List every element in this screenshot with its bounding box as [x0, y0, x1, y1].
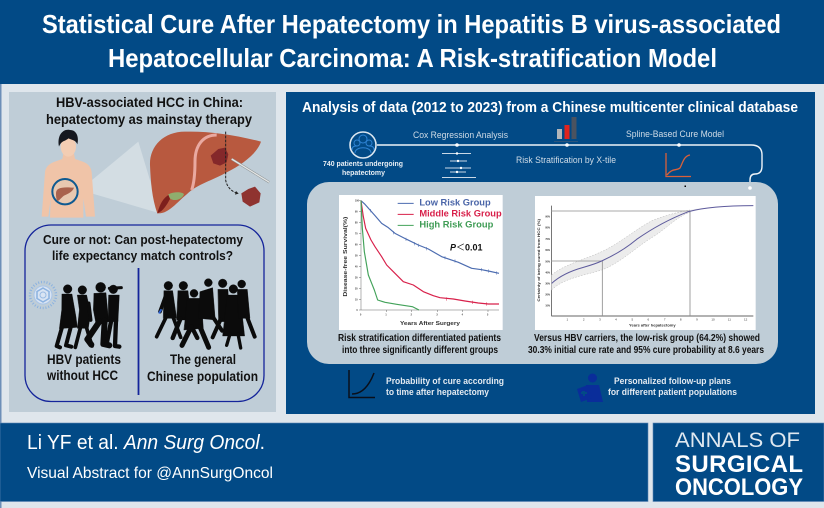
chart: probability of cure: 5: [631, 317, 633, 321]
footer: citation: [0, 423, 648, 502]
chart: probability of cure: Certainty of being cured from HCC (%): [537, 218, 541, 302]
logo text: ONCOLOGY: [675, 474, 803, 501]
illustration: patient and liver: [42, 130, 269, 218]
chart: disease-free survival: Low Risk Group: [419, 198, 491, 208]
chart: probability of cure: 80%: [545, 228, 551, 230]
text: probability of cure: [386, 376, 504, 398]
chart: disease-free survival: 90: [355, 212, 358, 214]
chart: disease-free survival: 40: [355, 266, 358, 269]
chart: disease-free survival: Years After Surgery: [400, 321, 461, 327]
chart: probability of cure: 10%: [545, 305, 551, 307]
chart: disease-free survival: Middle Risk Group: [419, 209, 502, 219]
logo text: SURGICAL: [675, 451, 803, 478]
text: follow-up plans: [608, 376, 737, 398]
label: 740 patients: [323, 159, 403, 177]
chart: probability of cure: 20%: [545, 294, 551, 296]
question text: [43, 232, 244, 263]
label: 740 patients: 740 patients undergoing: [323, 159, 403, 168]
text: follow-up plans: for different patient populations: [608, 387, 737, 398]
left heading: hepatectomy as mainstay therapy: [46, 111, 252, 127]
chart: probability of cure: 8: [680, 317, 682, 321]
magnifier circle: [52, 179, 78, 204]
results card: [307, 182, 778, 364]
title text: [42, 9, 781, 73]
title text: Hepatocellular Carcinoma: A Risk-stratification Model: [108, 43, 717, 73]
panel: cure or not: [25, 225, 264, 402]
chart: probability of cure: 7: [664, 317, 666, 321]
chart: probability of cure: 50%: [545, 261, 551, 263]
label: 740 patients: hepatectomy: [342, 168, 386, 177]
chart: probability of cure: 11: [728, 317, 731, 321]
chart: probability of cure: 12: [744, 317, 748, 321]
chart: disease-free survival: 20: [355, 289, 358, 291]
chart: disease-free survival: 100: [355, 201, 360, 203]
workflow timeline: [377, 143, 762, 190]
chart: disease-free survival: 1: [385, 314, 387, 316]
caption: cure probability: 30.3% initial cure rate and 95% cure probability at 8.6 years: [528, 344, 764, 356]
chart: probability of cure: 6: [647, 317, 649, 321]
chart: disease-free survival: 2: [411, 314, 413, 316]
question text: Cure or not: Can post-hepatectomy: [43, 232, 244, 247]
chart: disease-free survival: 80: [355, 223, 358, 225]
chart: probability of cure: 1: [566, 317, 568, 321]
analysis heading: Analysis of data (2012 to 2023) from a Chinese multicenter clinical database: [302, 100, 798, 116]
chart: disease-free survival: High Risk Group: [419, 220, 494, 230]
label: HBV patients without HCC: [46, 351, 121, 383]
chart: disease-free survival: 10: [355, 300, 358, 302]
label: general Chinese population: The general: [170, 351, 236, 367]
chart: disease-free survival: 3: [436, 314, 438, 316]
silhouettes: HBV patients without HCC: [57, 282, 121, 347]
chart: probability of cure: 40%: [545, 271, 551, 274]
chart: disease-free survival: 5: [487, 314, 489, 316]
liver: [150, 132, 269, 213]
footer: journal logo: [653, 423, 824, 502]
chart: disease-free survival: [339, 195, 503, 330]
chart: probability of cure: 90%: [545, 216, 551, 218]
patient body: [42, 130, 95, 218]
logo text: [675, 429, 803, 501]
icon: bar chart: [554, 117, 578, 142]
label: spline model: Spline-Based Cure Model: [626, 129, 724, 139]
question text: life expectancy match controls?: [52, 248, 233, 263]
chart: disease-free survival: Disease-free Survival(%): [343, 216, 349, 297]
label: general Chinese population: Chinese population: [147, 368, 258, 384]
chart: disease-free survival: 70: [355, 234, 358, 236]
left heading: HBV-associated HCC in China:: [56, 94, 243, 110]
chart: disease-free survival: 0: [356, 310, 358, 312]
chart: probability of cure: 60%: [545, 250, 551, 252]
handle text: Visual Abstract for @AnnSurgOncol: [27, 465, 273, 482]
label: general Chinese population: [147, 351, 258, 384]
chart: disease-free survival: 50: [355, 256, 358, 258]
label: HBV patients without HCC: HBV patients: [47, 351, 121, 367]
text: follow-up plans: Personalized follow-up plans: [614, 376, 731, 387]
panel: left background context: [9, 92, 276, 412]
chart: disease-free survival: P＜0.01: [450, 241, 482, 254]
caption: risk stratification: into three significantly different groups: [342, 344, 498, 356]
chart: probability of cure: [535, 196, 756, 330]
icon: spline curve: [666, 153, 691, 176]
label: HBV patients without HCC: without HCC: [46, 367, 118, 383]
chart: probability of cure: 30%: [545, 283, 551, 285]
chart: probability of cure: 3: [599, 317, 601, 321]
icon: personalized plans: [577, 374, 603, 402]
label: Cox regression: Cox Regression Analysis: [413, 130, 508, 140]
icon: hepatitis B virus: [30, 282, 56, 308]
caption: risk stratification: Risk stratification differentiated patients: [338, 332, 501, 344]
icon: forest plot: [442, 152, 476, 178]
chart: disease-free survival: 4: [462, 313, 464, 316]
text: probability of cure: Probability of cure according: [386, 376, 504, 387]
panel: analysis: [286, 92, 815, 414]
chart: probability of cure: 9: [696, 317, 698, 321]
chart: probability of cure: 70%: [545, 239, 551, 241]
chart: disease-free survival: 30: [355, 278, 358, 280]
label: risk stratification: Risk Stratification by X-tile: [516, 155, 616, 165]
chart: probability of cure: 10: [711, 317, 715, 321]
chart: probability of cure: Years after hepatectomy: [629, 323, 676, 328]
icon: cure curve: [349, 370, 375, 398]
logo text: ANNALS OF: [675, 429, 800, 452]
title band: [0, 0, 824, 84]
caption: risk stratification: [338, 332, 501, 356]
icon: patients circle: [350, 132, 376, 158]
chart: probability of cure: 2: [583, 317, 585, 321]
caption: cure probability: [528, 332, 764, 356]
silhouettes: general Chinese population: [157, 279, 255, 348]
left heading: [46, 94, 252, 127]
chart: disease-free survival: 60: [355, 245, 358, 247]
citation text: Li YF et al. Ann Surg Oncol.: [27, 432, 265, 454]
caption: cure probability: Versus HBV carriers, the low-risk group (64.2%) showed: [534, 332, 760, 344]
text: probability of cure: to time after hepatectomy: [386, 387, 490, 398]
chart: probability of cure: 4: [615, 317, 617, 321]
chart: disease-free survival: 0: [360, 314, 362, 316]
